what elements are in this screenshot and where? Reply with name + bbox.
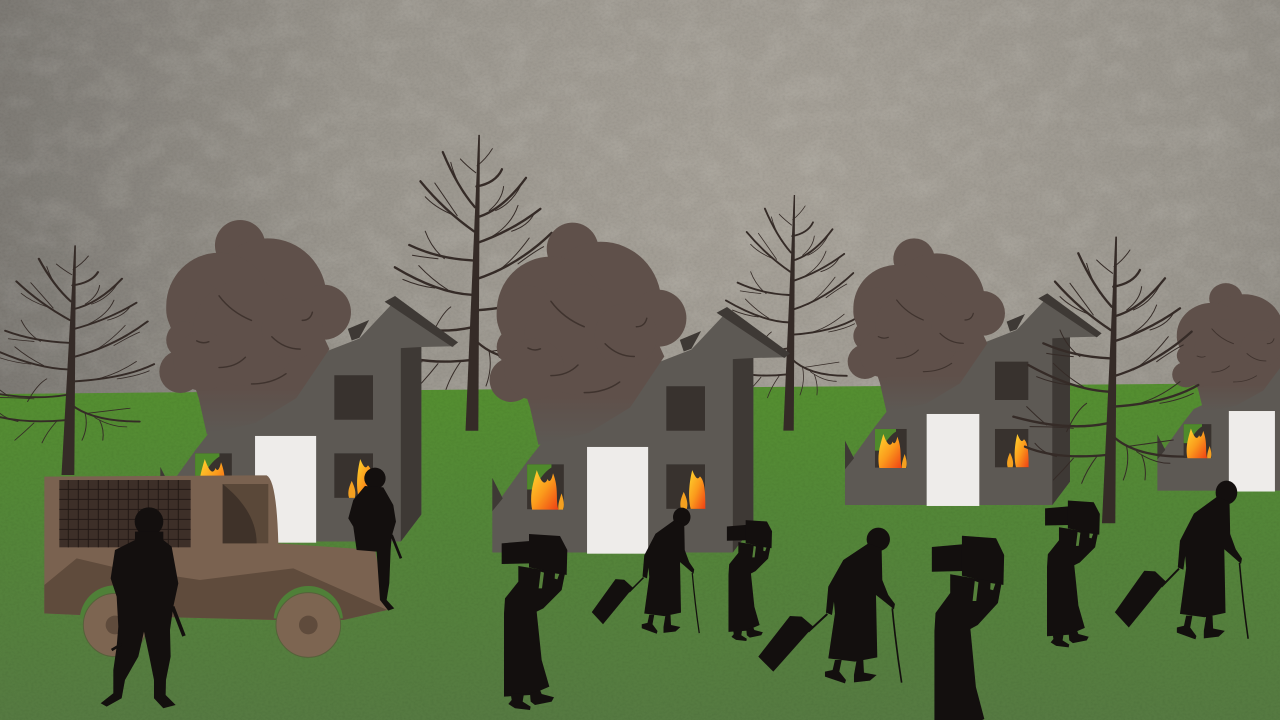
refugee: carrying box, right: [1045, 501, 1100, 647]
soldier: near vehicle: [101, 507, 184, 708]
tree: behind first house: [380, 135, 558, 431]
refugee: cane and suitcase, centre: [592, 508, 699, 634]
mesh window: [59, 480, 191, 547]
refugee: carrying box, large: [932, 536, 1004, 720]
refugee: cane and suitcase, far right: [1115, 481, 1248, 639]
tree: behind second house: [714, 195, 858, 431]
cab window: [223, 484, 268, 543]
refugee: carrying box, centre: [727, 520, 772, 641]
house 4 with smoke: [1157, 283, 1280, 492]
house 1 with smoke: [159, 220, 458, 543]
refugee: cane and suitcase, middle: [758, 528, 902, 683]
green field: [0, 383, 1280, 720]
tree: far left: [0, 245, 154, 475]
tree: between houses 3 and 4: [1013, 237, 1198, 523]
house 3 with smoke: [845, 238, 1102, 506]
soldier: by house with flame: [348, 468, 401, 611]
sky background: [0, 0, 1280, 400]
armoured vehicle: [44, 475, 387, 657]
house 2 with smoke: [490, 223, 790, 554]
refugee: carrying box, front left: [502, 534, 567, 710]
